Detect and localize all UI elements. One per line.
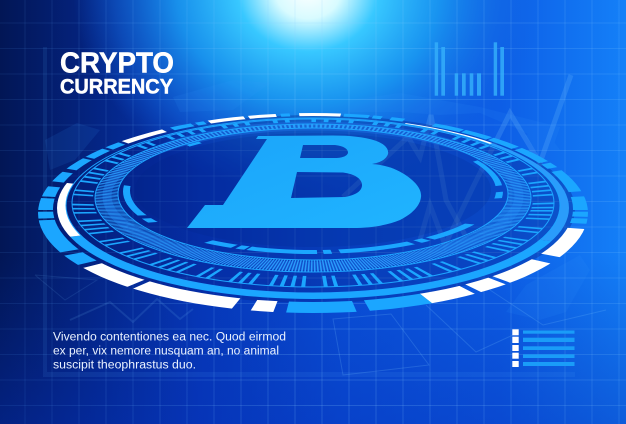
radial tick ring [113, 138, 513, 282]
hatch ring fill [107, 126, 519, 266]
title [60, 48, 174, 98]
coin interior [135, 133, 491, 247]
body text [53, 331, 286, 372]
ghost line charts [35, 75, 606, 375]
inner bar ring [123, 142, 503, 254]
bitcoin letter B [187, 136, 421, 228]
bar chart icon [435, 42, 504, 96]
title: CURRENCY [60, 75, 173, 98]
body text: Vivendo contentiones ea nec. Quod eirmod [53, 331, 286, 343]
body text: ex per, vix nemore nusquam an, no animal [53, 346, 279, 358]
ring base shading [51, 115, 575, 303]
bright band ring [113, 138, 513, 282]
list squares [512, 329, 519, 367]
bitcoin HUD ring [51, 115, 575, 303]
outer segmented ring [113, 138, 513, 282]
list icon [512, 329, 574, 367]
world map silhouette [45, 80, 590, 320]
thin ring lines [66, 118, 560, 293]
list bars [523, 330, 574, 366]
fine hatch ring [113, 138, 513, 282]
faint panels and guide bands [43, 47, 575, 377]
body text: suscipit theophrastus duo. [53, 360, 196, 372]
title: CRYPTO [60, 48, 174, 80]
